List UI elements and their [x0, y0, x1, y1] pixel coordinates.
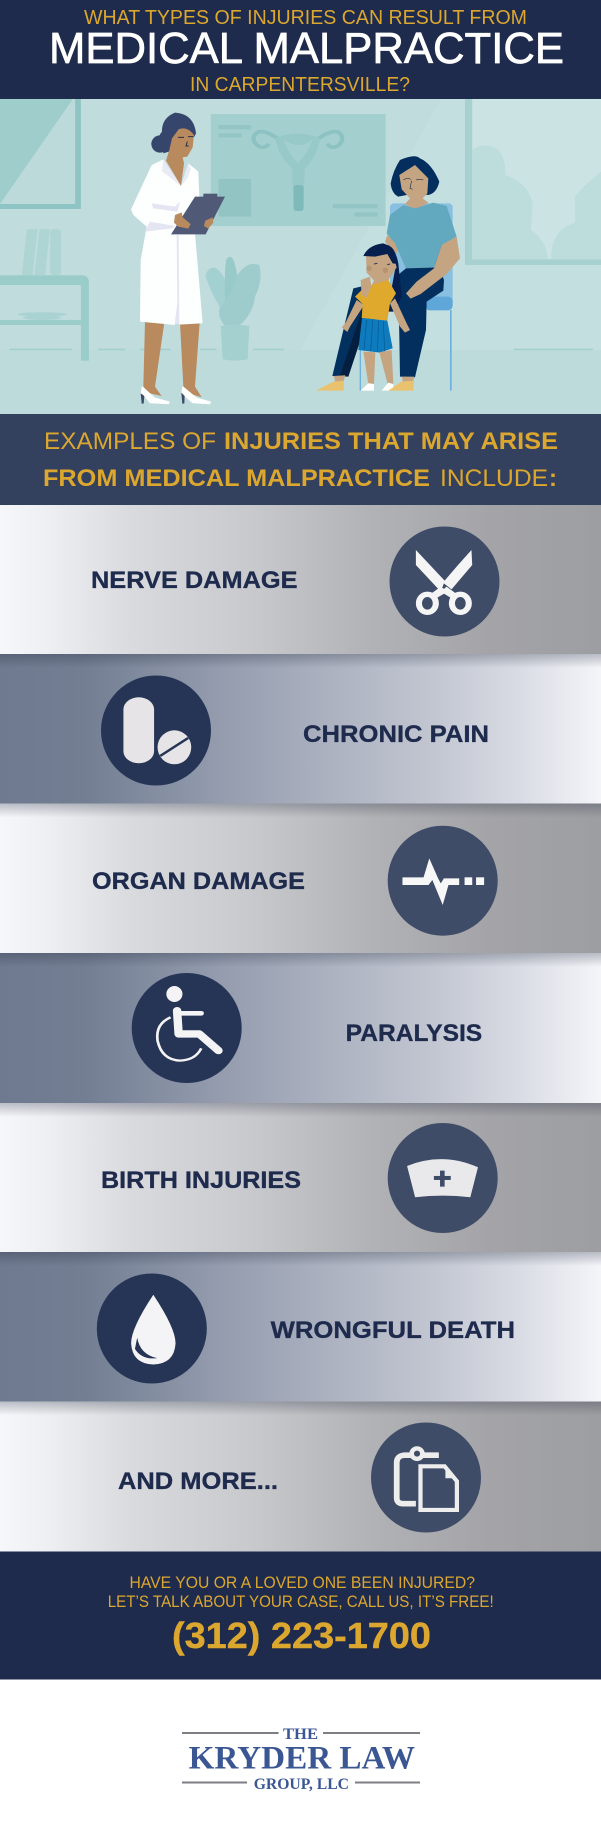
call to action line two: LET’S TALK ABOUT YOUR CASE, CALL US, IT’S FREE!	[108, 1593, 494, 1611]
icon: clipboard and document	[371, 1422, 481, 1532]
logo: the kryder law group	[0, 1680, 601, 1836]
row: chronic pain	[0, 654, 601, 804]
row: organ damage	[0, 804, 601, 953]
icon: scissors	[390, 526, 500, 636]
doctor figure	[131, 113, 225, 404]
row: paralysis	[0, 953, 601, 1103]
banner text line one: INJURIES THAT MAY ARISE	[224, 428, 558, 455]
logo word: the: THE	[283, 1726, 318, 1743]
illustration: clinic scene	[0, 99, 601, 414]
icon: wheelchair	[132, 973, 242, 1083]
label: ORGAN DAMAGE	[92, 868, 305, 895]
skin	[166, 128, 194, 186]
anatomy poster	[211, 114, 386, 226]
heading: line three: IN CARPENTERSVILLE?	[190, 74, 410, 96]
uterus diagram	[254, 132, 342, 211]
window with bushes	[465, 99, 601, 265]
chair	[360, 203, 453, 391]
banner text line one: EXAMPLES OF	[44, 428, 216, 455]
label: NERVE DAMAGE	[91, 567, 298, 594]
logo word: group llc: GROUP, LLC	[254, 1776, 349, 1793]
row: and more	[0, 1402, 601, 1552]
panel: title header	[0, 0, 601, 99]
banner text line two: :	[549, 465, 557, 492]
hair	[151, 113, 196, 153]
label: AND MORE...	[118, 1468, 278, 1495]
potted plant	[205, 257, 261, 361]
icon: nurse cap	[388, 1123, 498, 1233]
banner text line two: FROM MEDICAL MALPRACTICE	[43, 465, 430, 492]
wall picture frame	[0, 99, 81, 209]
label: BIRTH INJURIES	[101, 1167, 301, 1194]
white coat	[131, 159, 203, 325]
floor dashes	[10, 349, 593, 350]
banner text line one	[44, 428, 558, 455]
shoes	[141, 386, 211, 404]
panel: call to action footer	[0, 1552, 601, 1680]
banner text line two: INCLUDE	[440, 465, 548, 492]
icon: pulse	[388, 826, 498, 936]
heading: medical malpractice: MEDICAL MALPRACTICE	[49, 24, 564, 73]
label: PARALYSIS	[346, 1020, 482, 1047]
label: WRONGFUL DEATH	[271, 1317, 515, 1344]
facial marks	[178, 137, 193, 146]
icon: drop	[97, 1274, 207, 1384]
clinic background furniture	[0, 99, 601, 361]
logo word: kryder law: KRYDER LAW	[189, 1741, 415, 1777]
shelf table	[0, 229, 89, 361]
mother	[316, 156, 460, 391]
legs	[143, 322, 202, 397]
mother and child figures	[316, 156, 460, 391]
row: wrongful death	[0, 1252, 601, 1402]
icon: pills	[101, 676, 211, 786]
row: birth injuries	[0, 1103, 601, 1252]
call to action line one: HAVE YOU OR A LOVED ONE BEEN INJURED?	[130, 1574, 475, 1592]
clipboard	[171, 194, 225, 234]
heading: line one: WHAT TYPES OF INJURIES CAN RESULT FROM	[84, 7, 527, 29]
hands	[174, 212, 213, 229]
label: CHRONIC PAIN	[303, 721, 489, 748]
phone number: (312) 223-1700	[172, 1615, 431, 1656]
child	[342, 243, 410, 391]
row: nerve damage	[0, 505, 601, 654]
panel: examples banner	[0, 414, 601, 505]
